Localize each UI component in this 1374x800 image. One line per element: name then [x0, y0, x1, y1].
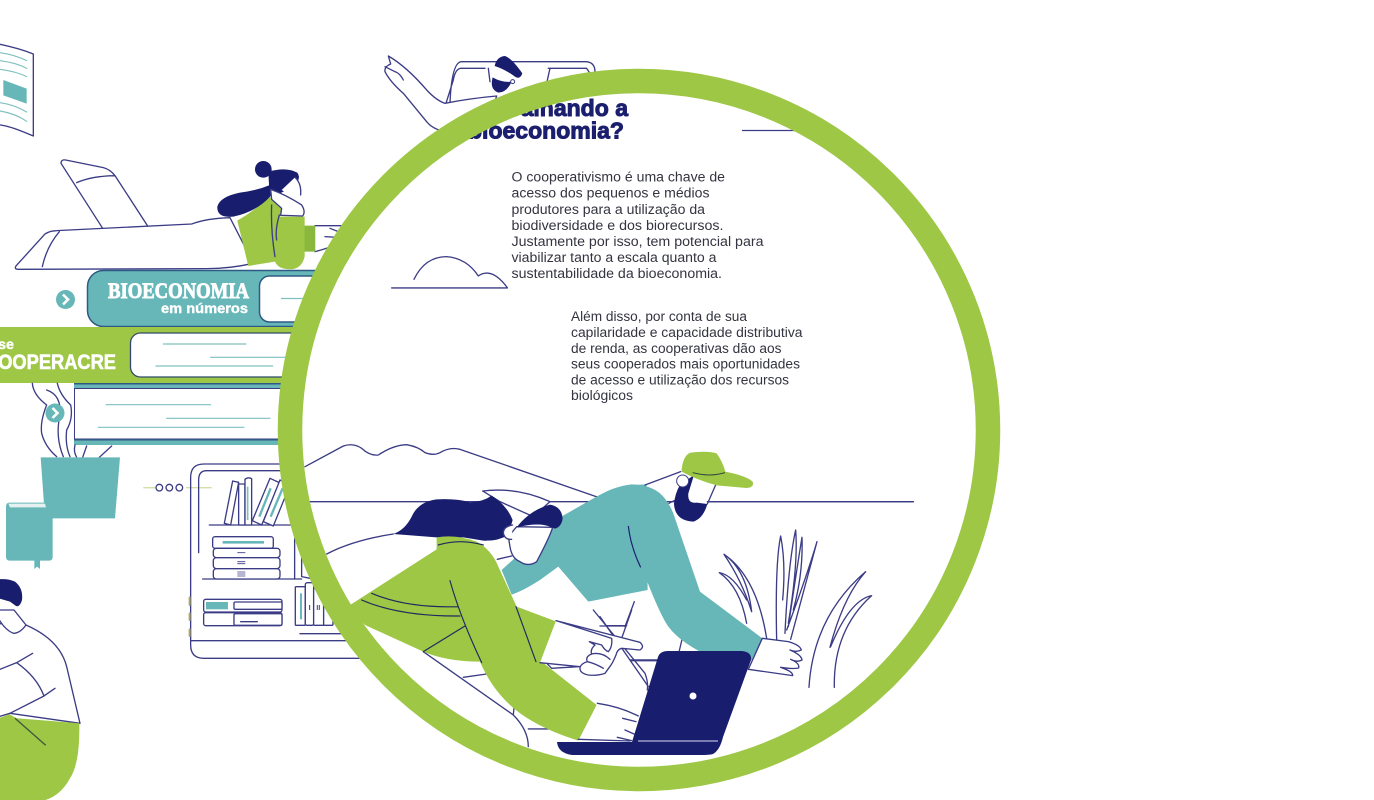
- illustration: man behind circle: [385, 56, 595, 132]
- text block: paragraph 2: biológicos: [571, 388, 633, 403]
- title: Trabalhando a: [472, 95, 629, 121]
- top man: head: [492, 56, 522, 93]
- books stacked: [213, 537, 280, 579]
- sofa woman: hair and bun: [217, 161, 301, 217]
- woman: face: [508, 527, 553, 564]
- books right: [295, 538, 333, 625]
- woman: band: [483, 490, 550, 517]
- book: Cooperacre: [0, 327, 360, 383]
- laptop: [557, 651, 751, 755]
- title: bioeconomia?: [468, 118, 624, 144]
- illustration: person bottom left: [0, 579, 80, 800]
- illustration: bookshelf: [190, 464, 377, 658]
- woman: pointing hand: [540, 610, 658, 690]
- text block: paragraph 2: de acesso e utilização dos recursos: [571, 372, 789, 388]
- text block: paragraph 1: produtores para a utilização da: [512, 202, 706, 217]
- woman: green jacket: [347, 536, 597, 741]
- illustration: woman reclining on sofa: [15, 160, 347, 269]
- title: [470, 98, 629, 139]
- decorative line right of title: [742, 130, 800, 132]
- icon: arrow button 1: [56, 290, 75, 309]
- books upright: [224, 478, 290, 526]
- man: plants: [719, 530, 872, 687]
- icon: plant vines in pot: [32, 383, 120, 518]
- text block: paragraph 1: sustentabilidade da bioeconomia.: [512, 266, 722, 281]
- text block: paragraph 1: Justamente por isso, tem potencial para: [512, 234, 764, 249]
- text block: paragraph 2: seus cooperados mais oportunidades: [571, 356, 800, 372]
- man: hand holding plants: [748, 638, 802, 676]
- text block: paragraph 2: de renda, as cooperativas dão aos: [571, 341, 782, 356]
- text block: paragraph 2: Além disso, por conta de sua: [571, 309, 747, 324]
- text block: paragraph 1: viabilizar tanto a escala quanto a: [512, 250, 717, 265]
- man: legs and table lines: [600, 602, 683, 687]
- illustration: landscape, man and woman with laptop: [305, 445, 913, 755]
- icon: arrow button 2: [46, 404, 64, 422]
- green circle ring: [290, 81, 988, 779]
- woman: chair and leg lines: [423, 652, 550, 747]
- decoration: three dots: [143, 484, 212, 491]
- man: head: [645, 452, 913, 522]
- man: teal sweater: [502, 484, 648, 602]
- text block: paragraph 1: O cooperativismo é uma chave de: [512, 170, 725, 184]
- icon: open book top left: [0, 44, 33, 136]
- icon: teal book with bookmark: [6, 503, 53, 569]
- woman: hand on laptop: [578, 703, 638, 741]
- text block: paragraph 2: capilaridade e capacidade distributiva: [571, 325, 803, 340]
- panel: circle interior: [299, 90, 979, 770]
- text block: paragraph 1: [512, 170, 764, 281]
- book: third book: [74, 383, 344, 445]
- text block: paragraph 1: acesso dos pequenos e médios: [512, 186, 710, 200]
- books flat: [204, 599, 282, 626]
- label: Bioeconomia: BIOECONOMIA: [108, 278, 249, 303]
- icon: cloud: [392, 257, 507, 288]
- woman: hair: [393, 496, 513, 541]
- label: em números: em números: [161, 300, 248, 316]
- text block: paragraph 1: biodiversidade e dos biorecursos.: [512, 218, 724, 233]
- text block: paragraph 2: [571, 309, 803, 403]
- landscape: [305, 445, 913, 502]
- woman: [327, 490, 597, 747]
- book: Bioeconomia em números: [88, 270, 360, 326]
